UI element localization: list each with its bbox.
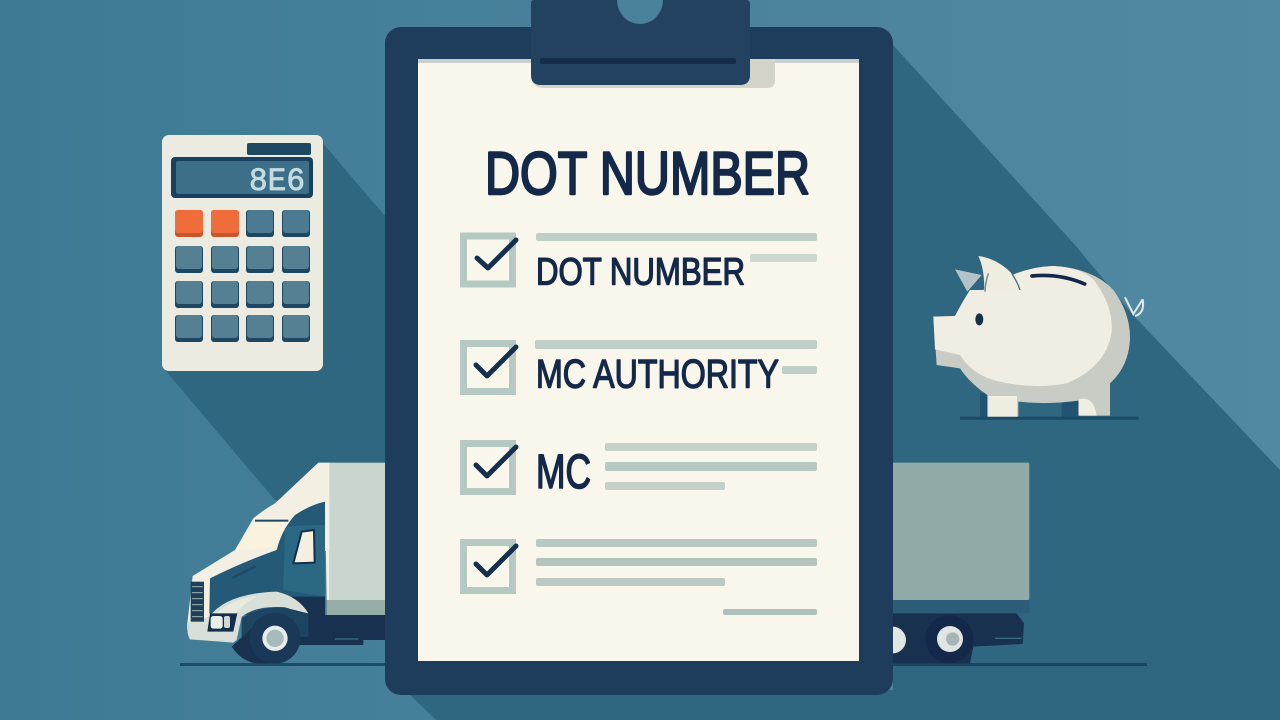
tail xyxy=(1125,297,1143,316)
icon: calculator xyxy=(162,135,323,371)
clipboard xyxy=(385,0,893,695)
clipboard cast shadow xyxy=(405,45,1280,720)
checklist row 2 xyxy=(464,340,817,396)
windshield xyxy=(235,522,288,551)
eye xyxy=(975,313,983,325)
checklist row 4 xyxy=(464,539,817,615)
calculator display digits: 8E6 xyxy=(249,163,305,200)
fender inner dark xyxy=(242,607,308,640)
checklist row 1 xyxy=(464,233,817,294)
front wheel xyxy=(250,613,300,664)
grille xyxy=(191,582,204,622)
ground line xyxy=(960,417,1139,420)
checklist row 2: MC AUTHORITY xyxy=(536,352,779,396)
clipboard board xyxy=(385,27,893,695)
road line left xyxy=(180,663,386,666)
legs highlight xyxy=(988,396,1017,417)
calculator keypad xyxy=(175,210,310,342)
calculator cast shadow xyxy=(165,140,385,530)
checklist row 3 xyxy=(464,443,817,499)
road line right xyxy=(893,663,1147,666)
cargo box front xyxy=(329,463,386,600)
rear wheel xyxy=(925,615,973,663)
checklist row 1: DOT NUMBER xyxy=(536,252,745,294)
hood vent xyxy=(233,567,255,577)
title: DOT NUMBER xyxy=(485,140,810,207)
cab window xyxy=(293,530,315,563)
icon: truck trailer xyxy=(893,463,1029,663)
door panel xyxy=(283,525,325,597)
chassis xyxy=(283,597,386,645)
coin slot xyxy=(1032,275,1085,284)
fender xyxy=(187,592,308,643)
headlight xyxy=(207,613,237,632)
checklist row 3: MC xyxy=(536,446,591,499)
cab blue body xyxy=(209,502,325,615)
cream fairing and hood xyxy=(187,463,330,640)
clip xyxy=(531,0,750,85)
rear wheel partial xyxy=(893,627,906,653)
body highlight xyxy=(933,266,1112,386)
near ear xyxy=(978,256,1021,293)
leg shadows xyxy=(980,393,990,417)
icon: truck cab xyxy=(187,463,386,664)
body xyxy=(933,266,1130,417)
far ear xyxy=(955,269,982,292)
icon: piggy bank xyxy=(933,256,1143,420)
paper xyxy=(418,59,859,661)
wheel arch shadow xyxy=(232,627,270,663)
clip shadow xyxy=(531,59,775,88)
